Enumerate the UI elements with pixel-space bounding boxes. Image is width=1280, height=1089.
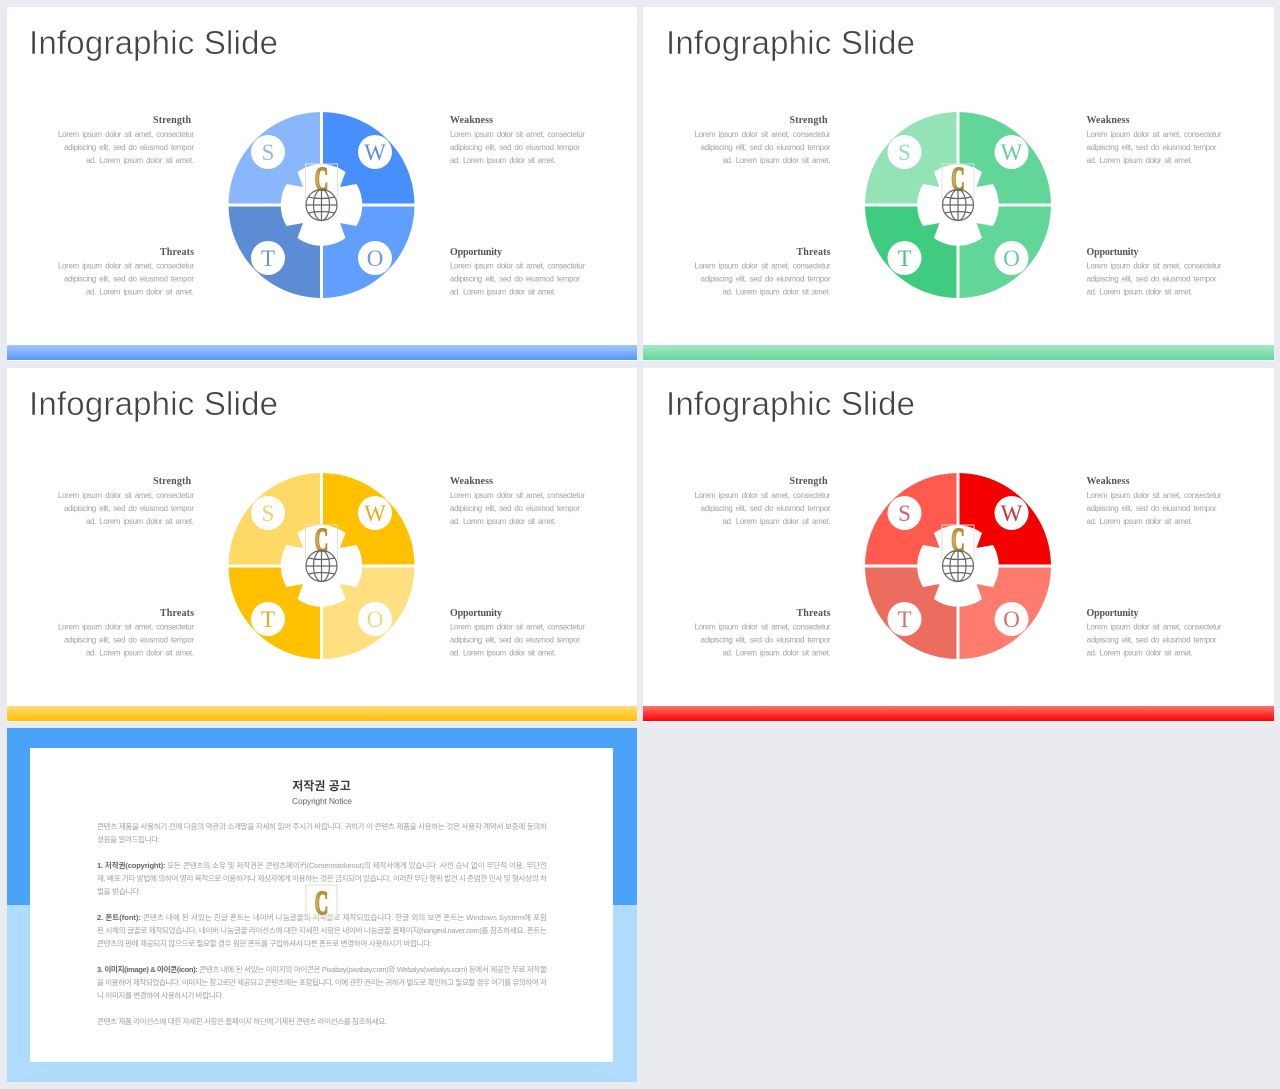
text block: threats: adipiscing elit, sed do eiusmod tempor (64, 274, 194, 284)
chart: SWOT wheel (865, 112, 1051, 298)
text block: strength (58, 115, 194, 165)
notice clause 1: copyright (97, 860, 547, 896)
text block: strength: ad. Lorem ipsum dolor sit amet. (86, 156, 194, 165)
chart: SWOT wheel (228, 473, 414, 659)
text block: strength: ad. Lorem ipsum dolor sit amet. (722, 156, 830, 165)
text block: opportunity: adipiscing elit, sed do eiusmod tempor (1086, 636, 1217, 644)
text block: strength: Lorem ipsum dolor sit amet, consectetur (58, 491, 194, 500)
text block: opportunity: ad. Lorem ipsum dolor sit amet. (450, 288, 556, 296)
text block: threats (694, 608, 831, 658)
icon: gold C and globe logo: C (951, 521, 965, 558)
text block: threats: ad. Lorem ipsum dolor sit amet. (86, 288, 194, 296)
text block: opportunity: Lorem ipsum dolor sit amet, consectetur (450, 262, 585, 270)
text block: weakness: ad. Lorem ipsum dolor sit amet. (450, 156, 556, 165)
chart: SWOT wheel: W (1001, 140, 1023, 165)
text block: strength: adipiscing elit, sed do eiusmod tempor (64, 504, 194, 513)
footer bar (643, 706, 1274, 721)
text block: weakness: Weakness (450, 115, 493, 126)
text block: weakness (450, 476, 585, 526)
text block: strength (58, 476, 194, 526)
text block: opportunity: adipiscing elit, sed do eiusmod tempor (1086, 274, 1217, 284)
text block: threats: adipiscing elit, sed do eiusmod tempor (700, 636, 831, 644)
panel: yellow SWOT slide (7, 368, 637, 722)
text block: opportunity (450, 247, 585, 296)
icon: gold C watermark: C (315, 884, 328, 921)
text block: strength (694, 476, 831, 526)
text block: opportunity: ad. Lorem ipsum dolor sit amet. (450, 648, 556, 658)
text block: opportunity: Opportunity (450, 247, 502, 258)
text block: opportunity: Opportunity (450, 608, 502, 619)
chart: SWOT wheel: S (898, 501, 911, 526)
text block: threats: Lorem ipsum dolor sit amet, consectetur (694, 622, 831, 632)
text block: opportunity: adipiscing elit, sed do eiusmod tempor (450, 274, 580, 284)
chart: SWOT wheel: T (897, 246, 912, 271)
footer bar (7, 345, 637, 360)
title: Infographic Slide (666, 24, 915, 61)
text block: threats: adipiscing elit, sed do eiusmod tempor (64, 636, 194, 644)
notice intro text: 셨음을 알려드립니다. (97, 834, 160, 844)
text block: opportunity (1086, 247, 1222, 296)
notice clause 1: copyright: 벌을 받습니다. (97, 886, 141, 896)
footer bar (643, 345, 1274, 360)
text block: weakness: Weakness (450, 476, 493, 487)
chart: SWOT wheel: S (898, 140, 911, 165)
text block: threats: Threats (796, 608, 831, 619)
chart: SWOT wheel: W (1001, 501, 1023, 526)
notice clause 2: font: 콘텐츠의 판에 제공되지 않으므로 필요할 경우 원문 폰트를 구입하셔서 다른 폰트로 변경하여 사용하시기 바랍니다. (97, 938, 432, 948)
text block: strength: Lorem ipsum dolor sit amet, consectetur (694, 130, 831, 139)
chart: SWOT wheel: T (897, 607, 912, 632)
text block: threats (58, 247, 194, 296)
text block: threats: Lorem ipsum dolor sit amet, consectetur (694, 262, 831, 270)
notice card (30, 748, 613, 1062)
panel: blue SWOT slide (7, 7, 637, 361)
chart: SWOT wheel: O (1003, 246, 1020, 271)
panel: green SWOT slide (643, 7, 1274, 361)
text block: threats: Threats (160, 247, 194, 258)
chart: SWOT wheel: O (367, 607, 383, 632)
text block: opportunity (450, 608, 585, 658)
text block: strength: Lorem ipsum dolor sit amet, consectetur (58, 130, 194, 139)
text block: opportunity: Lorem ipsum dolor sit amet, consectetur (450, 622, 585, 632)
text block: weakness (450, 115, 585, 165)
icon: gold C and globe logo (306, 521, 338, 582)
text block: threats: adipiscing elit, sed do eiusmod tempor (700, 274, 831, 284)
text block: opportunity: Lorem ipsum dolor sit amet, consectetur (1086, 622, 1222, 632)
icon: gold C and globe logo: C (315, 521, 328, 558)
text block: weakness (1086, 476, 1222, 526)
text block: weakness: ad. Lorem ipsum dolor sit amet. (1086, 156, 1192, 165)
panel: copyright notice (7, 728, 637, 1082)
text block: strength: ad. Lorem ipsum dolor sit amet. (722, 517, 830, 526)
chart: SWOT wheel: W (364, 140, 386, 165)
text block: strength: ad. Lorem ipsum dolor sit amet. (86, 517, 194, 526)
text block: weakness: Weakness (1086, 115, 1130, 126)
notice intro text (97, 821, 547, 844)
text block: threats: ad. Lorem ipsum dolor sit amet. (722, 288, 830, 296)
text block: opportunity: Opportunity (1086, 247, 1138, 258)
title: Infographic Slide (666, 385, 915, 422)
text block: threats: ad. Lorem ipsum dolor sit amet. (86, 648, 194, 658)
text block: strength (694, 115, 831, 165)
text block: threats: Threats (160, 608, 194, 619)
text block: opportunity: ad. Lorem ipsum dolor sit amet. (1086, 648, 1192, 658)
icon: gold C and globe logo: C (315, 160, 328, 197)
text block: opportunity: Lorem ipsum dolor sit amet, consectetur (1086, 262, 1222, 270)
chart: SWOT wheel: O (367, 246, 383, 271)
text block: opportunity: adipiscing elit, sed do eiusmod tempor (450, 636, 580, 644)
chart: SWOT wheel (228, 112, 414, 298)
chart: SWOT wheel: W (364, 501, 386, 526)
text block: threats: ad. Lorem ipsum dolor sit amet. (722, 648, 830, 658)
notice clause 2: font (97, 912, 547, 948)
notice clause 3: image and icon: 니 이미지를 변경하여 사용하시기 바랍니다. (97, 990, 224, 1000)
title: Infographic Slide (29, 24, 278, 61)
text block: threats: Lorem ipsum dolor sit amet, consectetur (58, 622, 194, 632)
notice subheading: Copyright Notice (292, 796, 352, 806)
notice clause 3: image and icon (97, 964, 547, 1000)
text block: weakness: ad. Lorem ipsum dolor sit amet. (450, 517, 556, 526)
text block: opportunity (1086, 608, 1222, 658)
text block: strength: Strength (790, 115, 828, 126)
notice clause 2: font: 2. 폰트(font): 콘텐츠 내에 된 서있는 한글 폰트는 네이버 나눔글꼴의 저작물로 제작되었습니다. 한글 외의 보면 폰트는 Windows System에 포함 (97, 912, 547, 922)
text block: weakness: Lorem ipsum dolor sit amet, consectetur (1086, 130, 1222, 139)
notice clause 3: image and icon: 3. 이미지(image) & 아이콘(icon): 콘텐츠 내에 된 서있는 이미지의 아이콘은 Pixabay(pixabay.com)와 Webalys(webalys.com) 등에서 제공한 무료 저작물 (97, 964, 547, 974)
text block: weakness: Lorem ipsum dolor sit amet, consectetur (1086, 491, 1222, 500)
notice heading: 저작권 공고 (292, 778, 351, 793)
footer bar (7, 706, 637, 721)
text block: weakness: Lorem ipsum dolor sit amet, consectetur (450, 491, 585, 500)
text block: threats (58, 608, 194, 658)
icon: gold C and globe logo: C (951, 160, 965, 197)
text block: weakness: ad. Lorem ipsum dolor sit amet. (1086, 517, 1192, 526)
panel: red SWOT slide (643, 368, 1274, 722)
icon: gold C watermark (306, 884, 337, 921)
chart: SWOT wheel: O (1003, 607, 1020, 632)
notice clause 1: copyright: 재, 배포 기타 방법에 의하여 영리 목적으로 이용하거나 제삼자에게 이용하는 것은 금지되어 있습니다. 이러한 무단 행위 발견 시 준엄한 민사 및 형사상의 처 (97, 873, 547, 883)
icon: gold C and globe logo (942, 521, 974, 582)
text block: strength: adipiscing elit, sed do eiusmod tempor (700, 504, 831, 513)
text block: threats (694, 247, 831, 296)
text block: strength: Strength (153, 115, 191, 126)
text block: opportunity: ad. Lorem ipsum dolor sit amet. (1086, 288, 1192, 296)
text block: threats: Lorem ipsum dolor sit amet, consectetur (58, 262, 194, 270)
text block: strength: Strength (790, 476, 828, 487)
text block: strength: adipiscing elit, sed do eiusmod tempor (64, 143, 194, 152)
icon: gold C and globe logo (942, 160, 974, 220)
text block: strength: Strength (153, 476, 191, 487)
text block: strength: Lorem ipsum dolor sit amet, consectetur (694, 491, 831, 500)
text block: weakness: Lorem ipsum dolor sit amet, consectetur (450, 130, 585, 139)
text block: weakness: adipiscing elit, sed do eiusmod tempor (1086, 143, 1217, 152)
chart: SWOT wheel: T (261, 246, 275, 271)
chart: SWOT wheel: S (262, 501, 274, 526)
text block: weakness: adipiscing elit, sed do eiusmod tempor (1086, 504, 1217, 513)
notice closing text: 콘텐츠 제품 라이선스에 대한 자세한 사항은 홈페이지 하단에 기재된 콘텐츠 라이선스를 참조하세요. (97, 1016, 387, 1026)
notice clause 1: copyright: 1. 저작권(copyright): 모든 콘텐츠의 소유 및 저작권은 콘텐츠메이커(Contentstokeout)의 제작사에게 있습니다. 사전 승낙 없이 무단적 이용, 무단전 (97, 860, 547, 870)
notice intro text: 콘텐츠 제품을 사용하기 전에 다음의 약관과 소개말을 자세히 읽어 주시기 바랍니다. 귀하가 이 콘텐츠 제품을 사용하는 것은 사용자 계약서 보증에 동의하 (97, 821, 547, 831)
notice clause 3: image and icon: 을 이용하여 제작되었습니다. 이미지는 참고로만 제공되고 콘텐츠에는 포함됩니다. 이에 관한 권리는 귀하가 별도로 확인하고 필요할 경우 여기를 유의하여 저 (97, 977, 547, 987)
icon: gold C and globe logo (306, 160, 338, 220)
chart: SWOT wheel: T (261, 607, 275, 632)
text block: threats: Threats (796, 247, 831, 258)
text block: weakness: adipiscing elit, sed do eiusmod tempor (450, 504, 580, 513)
text block: weakness (1086, 115, 1222, 165)
text block: opportunity: Opportunity (1086, 608, 1138, 619)
text block: weakness: Weakness (1086, 476, 1130, 487)
text block: weakness: adipiscing elit, sed do eiusmod tempor (450, 143, 580, 152)
chart: SWOT wheel: S (262, 140, 274, 165)
chart: SWOT wheel (865, 473, 1051, 659)
text block: strength: adipiscing elit, sed do eiusmod tempor (700, 143, 831, 152)
title: Infographic Slide (29, 385, 278, 422)
notice clause 2: font: 된 시체의 글꼴로 제작되었습니다. 네이버 나눔글꼴 라이선스에 대한 자세한 사항은 네이버 나눔글꼴 홈페이지(hangeul.naver.com)를 참조하세요. 폰트는 (97, 925, 547, 935)
